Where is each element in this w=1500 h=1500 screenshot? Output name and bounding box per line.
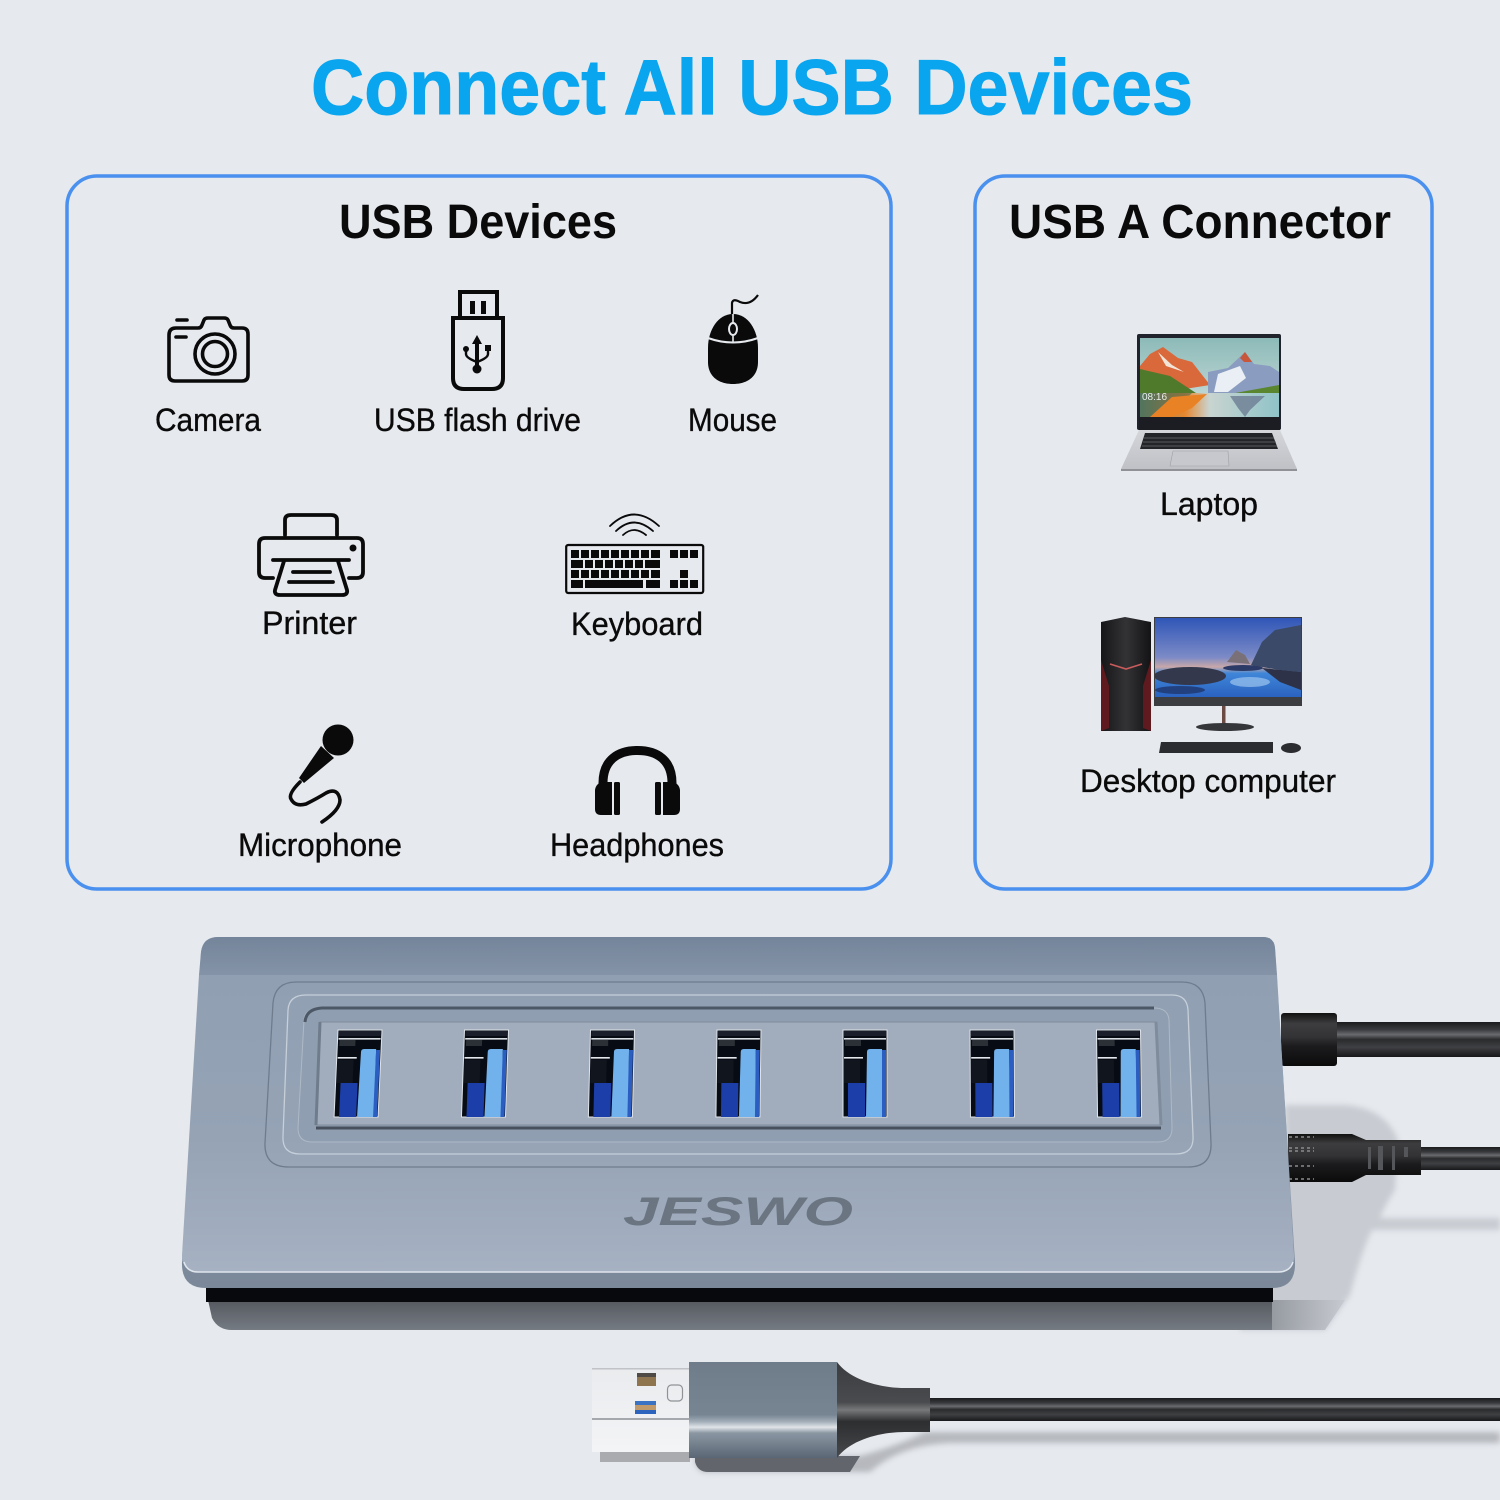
heading: USB Devices: USB Devices <box>339 196 617 249</box>
label: Mouse: Mouse <box>688 402 777 438</box>
USB port 3 <box>588 1030 634 1117</box>
USB port 4 <box>716 1030 761 1117</box>
boot <box>837 1362 930 1458</box>
keyboard <box>1159 742 1273 753</box>
ground shadow under hub <box>208 1300 1272 1330</box>
icon: camera <box>169 318 248 381</box>
USB hub product <box>182 937 1500 1330</box>
foot <box>206 1286 1273 1302</box>
icon: USB flash drive <box>453 292 503 389</box>
image: laptop <box>1121 334 1297 471</box>
power cable <box>1281 1013 1500 1066</box>
USB port 1 <box>334 1030 382 1117</box>
label: Headphones: Headphones <box>550 827 724 863</box>
stand <box>1222 706 1226 730</box>
plug cable <box>930 1398 1500 1421</box>
icon: wireless keyboard <box>566 514 703 593</box>
hub shadow <box>1240 1105 1500 1330</box>
icon: microphone <box>290 724 354 822</box>
brand logo: JESWO <box>623 1190 853 1234</box>
USB-A plug and cable <box>592 1362 1500 1472</box>
tower <box>1101 617 1151 731</box>
USB port 6 <box>970 1030 1014 1117</box>
monitor <box>1154 617 1302 706</box>
front face <box>182 975 1294 1272</box>
hub body <box>182 937 1295 1288</box>
title: Connect All USB Devices <box>311 43 1193 131</box>
top bevel <box>199 937 1277 975</box>
label: Printer: Printer <box>262 605 357 641</box>
icon: headphones <box>595 750 680 815</box>
image: desktop computer <box>1101 617 1302 753</box>
recess outlines <box>265 982 1211 1167</box>
plug shadow <box>695 1432 1500 1472</box>
aluminium housing <box>689 1362 837 1458</box>
audio jack cable <box>1288 1134 1500 1182</box>
label: Laptop: Laptop <box>1160 486 1258 522</box>
heading: USB A Connector: USB A Connector <box>1009 196 1391 249</box>
metal tip <box>592 1368 690 1462</box>
USB port 7 <box>1096 1030 1142 1117</box>
panel: USB Devices <box>67 176 891 889</box>
label: Camera: Camera <box>155 402 261 438</box>
icon: mouse <box>708 295 758 384</box>
icon: printer <box>259 515 363 595</box>
label: Microphone: Microphone <box>238 827 402 863</box>
label: Desktop computer: Desktop computer <box>1080 763 1336 799</box>
image: laptop: 08:16 <box>1142 392 1167 403</box>
USB port 2 <box>461 1030 508 1117</box>
label: Keyboard: Keyboard <box>571 606 703 642</box>
label: USB flash drive: USB flash drive <box>374 402 581 438</box>
panel: USB A Connector <box>975 176 1432 889</box>
USB port 5 <box>843 1030 887 1117</box>
stand base <box>1196 723 1254 731</box>
mouse <box>1281 743 1301 753</box>
